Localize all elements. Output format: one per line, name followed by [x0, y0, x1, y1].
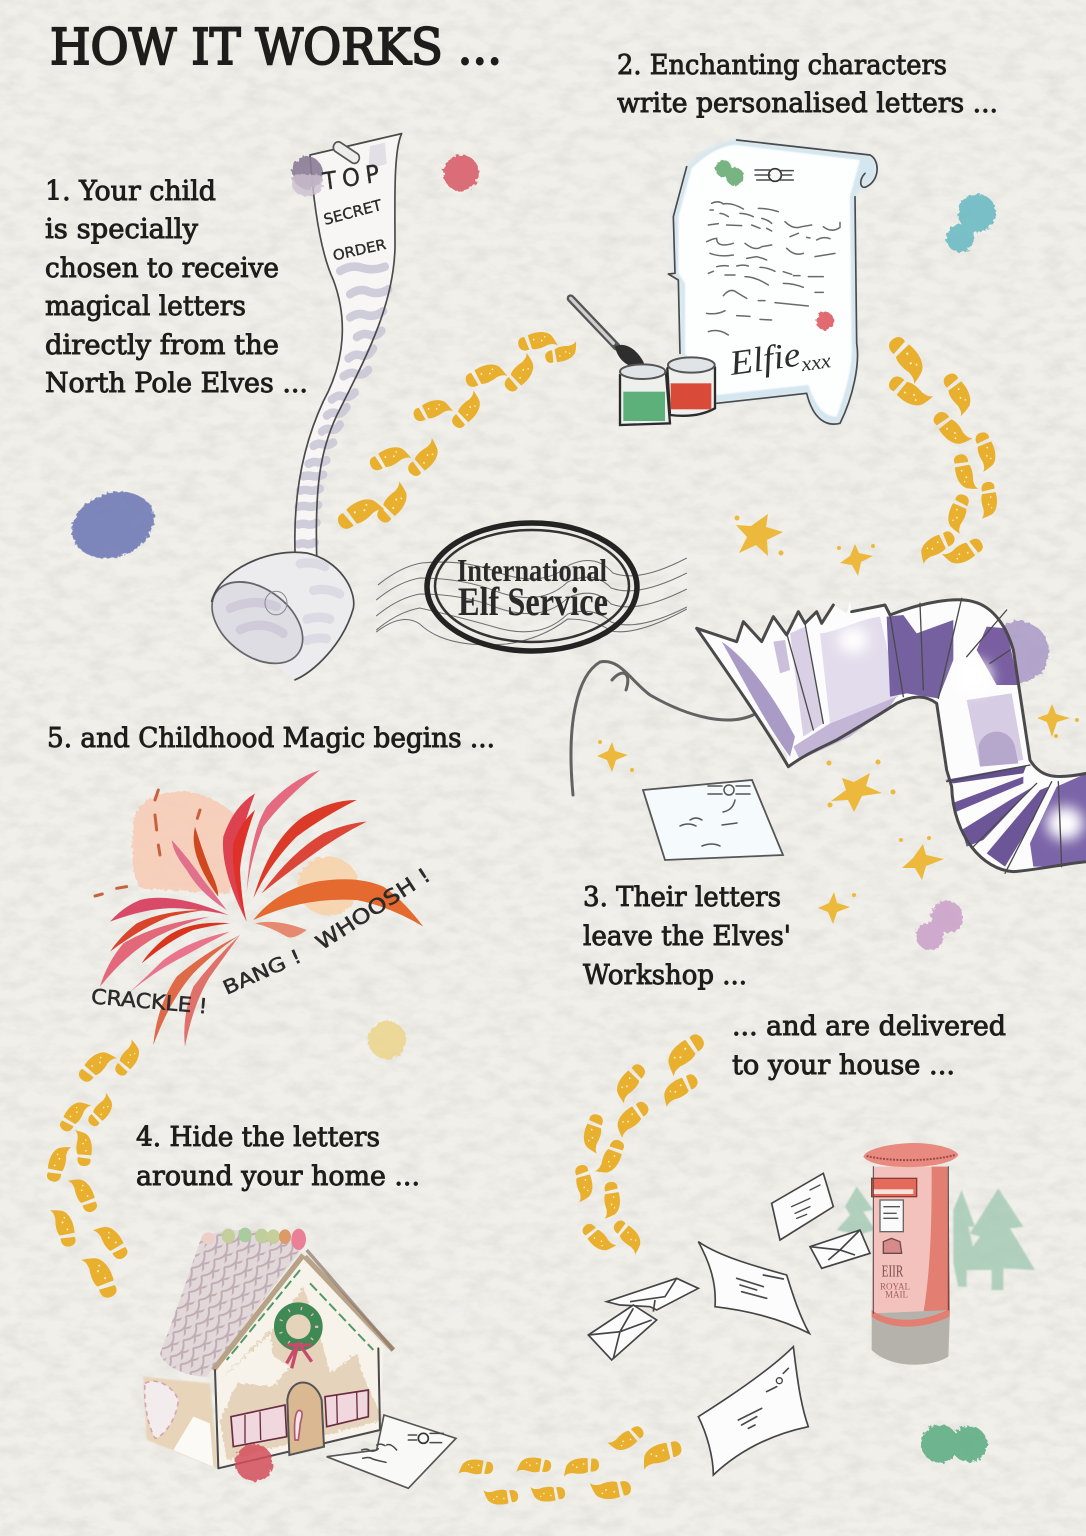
- text: step 1: 1. Your child: [45, 176, 216, 207]
- blot: red top: [443, 155, 479, 191]
- text: step 2: [617, 50, 998, 119]
- blot: green: [715, 160, 744, 186]
- star 6: [818, 892, 856, 924]
- text: step 3: 3. Their letters: [583, 882, 781, 913]
- footprints: trail 5: [44, 1039, 145, 1302]
- label: crackle bang whoosh: BANG !: [219, 945, 305, 1000]
- text: step 4: around your home ...: [136, 1161, 420, 1192]
- label: signature: xxx: [799, 350, 833, 376]
- windows: [231, 1405, 287, 1447]
- label: royal mail: ROYAL: [880, 1281, 910, 1291]
- star 5: [899, 836, 944, 880]
- label: top secret order: ORDER: [332, 236, 388, 265]
- letter script lines: [707, 202, 840, 335]
- label: crackle bang whoosh: [90, 863, 435, 1018]
- illustration: purple tube: [697, 598, 1086, 873]
- blot: red: [816, 312, 834, 330]
- letter 1: [772, 1173, 833, 1240]
- scroll roll: [212, 552, 354, 680]
- star 3: [1037, 704, 1079, 738]
- gable trim: [213, 1255, 393, 1370]
- label: royal mail: [880, 1281, 910, 1300]
- letter 2: [698, 1242, 809, 1333]
- text: delivered: ... and are delivered: [732, 1011, 1006, 1042]
- footprints: trail 2: [883, 333, 1000, 570]
- illustration: postbox and letters: [588, 1143, 1035, 1475]
- blot: yellow: [368, 1021, 406, 1059]
- blot: purple on scroll: [292, 156, 323, 196]
- pillar box: [872, 1167, 950, 1313]
- star 4: [826, 760, 896, 812]
- footprints: trail 1: [334, 328, 580, 535]
- icon: green paint jar: [620, 364, 670, 425]
- label: crackle bang whoosh: WHOOSH !: [311, 863, 435, 955]
- label: royal mail: MAIL: [885, 1290, 908, 1300]
- text: step 4: [136, 1122, 420, 1192]
- illustration: top secret scroll: [198, 134, 402, 680]
- text: delivered: [732, 1011, 1006, 1081]
- text: step 1: [45, 176, 308, 399]
- text: step 3: Workshop ...: [583, 960, 747, 991]
- text: step 1: magical letters: [45, 291, 246, 322]
- stamp: International Elf Service: International: [457, 552, 607, 588]
- blot: blue left: [63, 481, 163, 569]
- title: HOW IT WORKS ...: [50, 18, 502, 76]
- icon: paint brush: [571, 298, 646, 369]
- icon: paper clip: [332, 140, 361, 165]
- text: step 3: [583, 882, 791, 991]
- yellow stars: [597, 514, 1079, 924]
- blot: green: [921, 1425, 987, 1463]
- text: step 1: is specially: [45, 214, 199, 245]
- stamp: International Elf Service: Elf Service: [458, 579, 608, 624]
- letter by house: [327, 1415, 456, 1488]
- blot: teal right: [946, 194, 996, 252]
- icon: red paint jar: [667, 357, 715, 416]
- label: top secret order: T O P: [320, 159, 381, 196]
- text: step 2: write personalised letters ...: [617, 88, 998, 119]
- blot: pink and purple: [916, 901, 963, 950]
- ridge beads: [202, 1228, 306, 1250]
- text: step 4: 4. Hide the letters: [136, 1122, 380, 1153]
- door: [287, 1382, 324, 1455]
- illustration: pencil string and letter: [571, 662, 783, 860]
- star 1: [734, 514, 784, 556]
- envelopes: [588, 1278, 698, 1360]
- text: step 1: North Pole Elves ...: [45, 368, 308, 399]
- text: step 2: 2. Enchanting characters: [617, 50, 947, 81]
- label: top secret order: [320, 159, 388, 265]
- roof tiles: [160, 1230, 303, 1377]
- illustration: postbox and letters: EIIR: [882, 1262, 904, 1281]
- stamp: International Elf Service: [376, 523, 687, 651]
- icon: elf seal: [755, 169, 793, 181]
- illustration: gingerbread house: [143, 1228, 456, 1488]
- letter 3: [698, 1347, 808, 1475]
- blot: behind tube: [988, 621, 1049, 682]
- label: crackle bang whoosh: CRACKLE !: [90, 984, 209, 1018]
- text: step 1: chosen to receive: [45, 253, 279, 284]
- text: delivered: to your house ...: [732, 1050, 955, 1081]
- illustration: personalised letter with paints: [571, 140, 877, 425]
- footprints: trail 4: [458, 1422, 684, 1506]
- illustration: fireworks: [90, 770, 435, 1047]
- star 7: [597, 740, 634, 772]
- text: step 5: 5. and Childhood Magic begins ...: [47, 723, 495, 754]
- envelope 1: [810, 1230, 870, 1268]
- text: step 3: leave the Elves': [583, 921, 791, 952]
- pencil outline: [697, 600, 1086, 872]
- highlights: [838, 627, 1083, 840]
- wreath: [280, 1308, 317, 1368]
- blot: red on house: [235, 1444, 273, 1481]
- text: step 1: directly from the: [45, 330, 279, 361]
- ink blots: [63, 155, 996, 1463]
- label: signature: Elfie: [727, 335, 798, 383]
- trees: [837, 1187, 1035, 1290]
- label: top secret order: SECRET: [322, 198, 384, 229]
- star 2: [837, 544, 875, 576]
- footprints: trail 3: [572, 1030, 709, 1257]
